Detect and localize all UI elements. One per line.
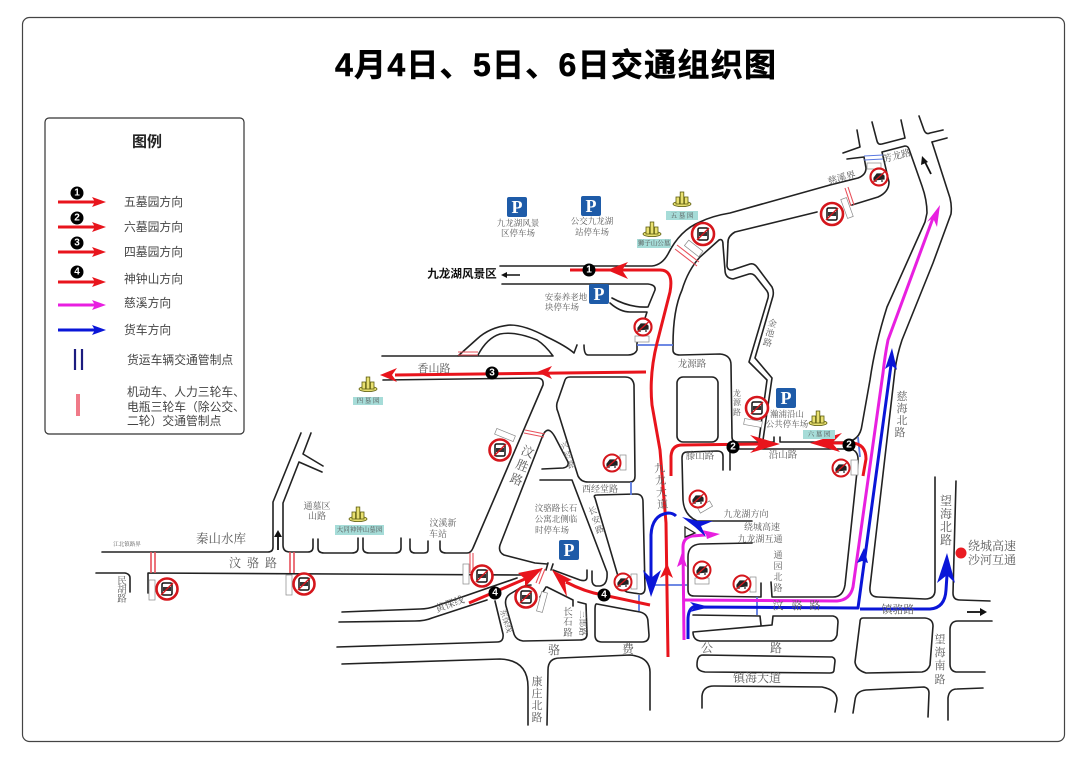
legend: cixi route — [58, 296, 171, 310]
legend: route 1: 五墓园方向 — [124, 195, 183, 209]
road names: 道 — [657, 497, 669, 511]
parking: jiulong lake scenic: 九龙湖风景 — [497, 218, 540, 228]
road names: 海 — [940, 507, 952, 521]
cemetery: four: 四 墓 园 — [357, 396, 380, 404]
road names: 北 — [773, 571, 783, 582]
parking: temporary lot: 时停车场 — [535, 525, 569, 535]
road names: 沿山路 — [769, 449, 798, 461]
road names: 骆 — [247, 556, 259, 570]
road names: 民 — [117, 576, 127, 587]
legend: route 2: 2 — [74, 212, 80, 224]
road names: 路 — [762, 336, 773, 349]
road names — [113, 146, 952, 724]
road names: 长 — [587, 504, 599, 517]
parking: bus station: 公交九龙湖 — [571, 216, 614, 226]
road names: 通墓区 — [303, 500, 331, 511]
cemetery: datong shenzhong: 大同神钟山墓园 — [337, 524, 383, 534]
road names: 胜 — [514, 456, 531, 475]
legend: truck route: 货车方向 — [124, 323, 171, 337]
marker 4 right — [598, 588, 610, 602]
road names: 车站 — [429, 528, 447, 539]
legend: motor vehicle control point: 电瓶三轮车（除公交、 — [127, 400, 245, 414]
truck route — [643, 348, 955, 639]
road names: 兴 — [559, 439, 571, 452]
legend: motor vehicle control point: 二轮）交通管制点 — [127, 414, 222, 428]
parking: xiepu: 公共停车场 — [766, 419, 809, 429]
parking: bus station — [571, 196, 614, 237]
road names: 龙源路 — [678, 358, 707, 370]
legend: cixi route: 慈溪方向 — [124, 296, 171, 310]
road names: 慈溪界 — [826, 168, 858, 188]
road names: 滕山路 — [686, 450, 715, 462]
legend: route 2 — [58, 212, 183, 234]
road names: 胡 — [117, 584, 127, 596]
marker 2 left — [726, 440, 740, 454]
marker 4 left — [488, 586, 502, 600]
route 3: to four cemetery — [380, 366, 646, 382]
road names: 北 — [532, 699, 542, 712]
destination: shahe interchange: 沙河互通 — [968, 552, 1016, 567]
road names: 镇海大道 — [733, 670, 781, 685]
road names: 北 — [896, 414, 908, 427]
road names: 路 — [508, 471, 525, 489]
road names: 路 — [934, 673, 946, 686]
road names: 汶溪新 — [429, 517, 457, 528]
road names: 石 — [563, 617, 573, 628]
road names: 康 — [532, 674, 542, 688]
parking: xiepu: 瀚浦沿山 — [770, 409, 804, 419]
parking: xiepu: P — [780, 388, 792, 408]
parking: temporary lot: 公寓北侧临 — [535, 514, 578, 524]
road names: 园 — [773, 561, 783, 571]
road names: 路 — [532, 711, 542, 724]
road names: 通 — [773, 550, 783, 560]
marker 1: 1 — [586, 264, 592, 276]
road names: 九龙湖方向 — [723, 508, 769, 519]
marker 3: 3 — [489, 368, 495, 378]
road names: 山路 — [308, 510, 326, 521]
marker 2 left: 2 — [730, 442, 736, 452]
panel: legend — [45, 118, 245, 434]
legend: truck control point — [75, 349, 233, 370]
legend: route 4 — [58, 266, 183, 287]
road names: 路 — [594, 523, 606, 536]
road names: 骆 — [548, 643, 560, 657]
parking: jiulong lake scenic — [497, 197, 540, 238]
parking: antai — [545, 284, 609, 312]
parking: temporary lot: P — [564, 540, 574, 560]
road names: 金 — [767, 316, 778, 329]
road names: 秦山水库 — [196, 531, 246, 546]
parking: temporary lot — [535, 503, 579, 560]
route 4: to shenzhong mountain — [469, 568, 650, 605]
parking: jiulong lake scenic: 区停车场 — [501, 228, 535, 238]
road names: 江北镇路界 — [113, 540, 141, 548]
route 1: to five cemetery — [570, 262, 673, 657]
destination: shahe interchange: 绕城高速 — [968, 538, 1016, 553]
parking: temporary lot: 汶骆路长石 — [535, 503, 578, 513]
parking: xiepu — [766, 388, 809, 429]
marker 2 right: 2 — [846, 440, 852, 450]
legend: truck control point: 货运车辆交通管制点 — [127, 353, 233, 367]
road names: 庄 — [532, 686, 542, 700]
route 2: to six cemetery — [671, 433, 866, 476]
cemetery: four — [353, 377, 383, 405]
no-entry signs — [149, 163, 888, 612]
legend: truck route — [58, 323, 171, 337]
parking: bus station: P — [586, 196, 596, 216]
marker 1 — [582, 264, 596, 276]
road names: 路 — [773, 582, 783, 593]
road names: 路 — [117, 593, 127, 605]
legend heading: 图例 — [132, 134, 162, 150]
road names: 汶 — [229, 556, 241, 570]
marker 2 right — [842, 438, 856, 452]
legend: route 1 — [58, 186, 183, 209]
legend: route 4: 神钟山方向 — [124, 272, 183, 286]
legend: route 3: 四墓园方向 — [124, 245, 183, 259]
road names: 三郎路 — [578, 610, 588, 636]
road names: 池 — [764, 326, 776, 339]
road names: 黄保线 — [433, 593, 466, 615]
black direction arrow: up at qinshan — [274, 530, 282, 550]
road names: 九龙湖互通 — [737, 533, 783, 544]
road names: 南 — [934, 659, 946, 672]
cemetery: five: 五 墓 园 — [671, 210, 694, 220]
road names: 汶 — [519, 443, 536, 461]
motor vehicle control points — [151, 187, 854, 584]
road names: 镇骆路 — [882, 602, 914, 616]
road names: 路 — [810, 599, 820, 612]
road names: 骆 — [792, 599, 802, 612]
road names: 芳龙路 — [881, 146, 913, 166]
road names: 龙 — [733, 388, 741, 398]
road network — [96, 116, 992, 725]
road names: 费 — [622, 641, 635, 656]
parking: antai: 块停车场 — [545, 302, 579, 312]
cemetery: six: 六 墓 园 — [808, 429, 831, 438]
marker 3 — [486, 366, 498, 380]
road names: 长 — [563, 607, 573, 618]
road names: 安 — [590, 514, 602, 526]
legend: route 3: 3 — [74, 238, 80, 248]
black direction arrow: east at zhenluo — [967, 608, 987, 616]
parking: jiulong lake scenic: P — [512, 197, 522, 217]
legend: motor vehicle control point — [76, 385, 245, 428]
road names: 源 — [733, 398, 742, 406]
parking: bus station: 站停车场 — [575, 227, 609, 237]
road names: 东保线 — [498, 608, 515, 634]
road names: 汶 — [772, 599, 784, 612]
road names: 大 — [655, 485, 668, 499]
marker 4 right: 4 — [601, 590, 607, 600]
road names: 香山路 — [418, 361, 450, 375]
cemetery: five — [666, 192, 698, 220]
road names: 海 — [934, 645, 946, 659]
parking: antai: P — [594, 284, 604, 304]
destination: shahe interchange — [956, 538, 1016, 567]
legend: route 2: 六墓园方向 — [124, 220, 183, 234]
cemetery: six — [803, 411, 835, 439]
legend: motor vehicle control point: 机动车、人力三轮车、 — [127, 385, 245, 399]
road names: 路 — [940, 533, 952, 547]
cixi route — [677, 205, 940, 640]
road names: 路 — [563, 627, 573, 639]
road names: 西经堂路 — [582, 483, 618, 494]
road names: 望 — [940, 493, 952, 508]
cemetery: lion hill — [637, 222, 671, 248]
road names: 九 — [653, 461, 666, 476]
legend: route 4: 4 — [74, 266, 80, 278]
road names: 路 — [566, 458, 578, 471]
legend: route 3 — [58, 236, 183, 259]
road names: 路 — [265, 556, 277, 570]
title: 4月4日、5日、6日交通组织图 — [335, 47, 776, 83]
road names: 北 — [940, 520, 952, 534]
cemetery: lion hill: 狮子山公墓 — [638, 238, 671, 247]
legend: route 1: 1 — [74, 188, 80, 198]
destination label: jiulong lake — [427, 266, 520, 280]
road names: 经 — [562, 449, 574, 461]
parking: antai: 安泰养老地 — [545, 292, 588, 302]
road names: 公 — [701, 641, 713, 655]
destination label: jiulong lake: 九龙湖风景区 — [427, 266, 497, 280]
road names: 绕城高速 — [744, 521, 780, 532]
road names: 龙 — [654, 473, 667, 487]
road names: 路 — [770, 641, 782, 655]
truck control points — [631, 155, 883, 615]
road names: 路 — [894, 426, 906, 439]
marker 4 left: 4 — [492, 588, 498, 598]
black direction arrow: north-west at fanglong — [921, 156, 931, 174]
icon: white triangle island — [685, 527, 695, 537]
road names: 望 — [934, 632, 946, 646]
road names: 慈 — [896, 389, 908, 403]
road names: 海 — [896, 401, 908, 415]
cemetery: datong shenzhong — [335, 507, 384, 535]
road names: 路 — [733, 406, 741, 416]
